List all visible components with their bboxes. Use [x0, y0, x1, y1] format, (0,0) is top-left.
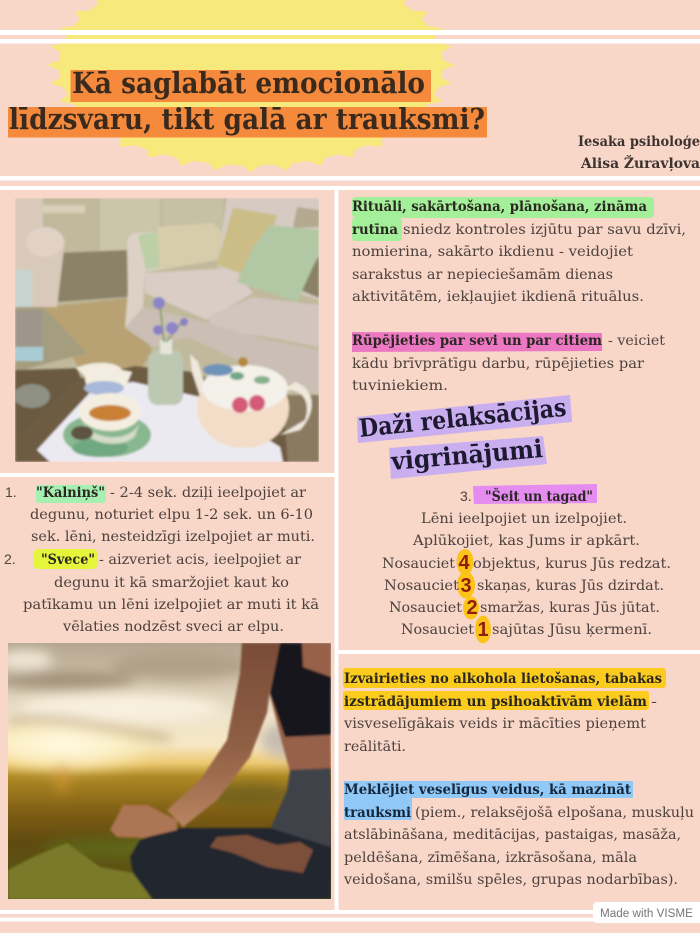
photo: tea tray in living room	[14, 198, 319, 462]
steps 1 and 2: breathing exercises: degunu it kā smaržojiet kaut ko	[54, 575, 289, 591]
step 3: here and now: 4	[458, 552, 470, 574]
step 3: here and now: Nosauciet	[382, 556, 455, 572]
care for self and others paragraph: kādu brīvprātīgu darbu, rūpējieties par	[352, 356, 644, 372]
ritual and routine paragraph: rutīna	[352, 222, 398, 238]
ritual and routine paragraph: nomierina, sakārto ikdienu - veidojiet	[352, 244, 633, 260]
healthy ways to reduce anxiety paragraph	[343, 781, 694, 888]
steps 1 and 2: breathing exercises: - aizveriet acis, ieelpojiet ar	[99, 552, 301, 568]
step 3: here and now: skaņas, kuras Jūs dzirdat.	[477, 578, 664, 594]
author credit: Alisa Žuravļova	[580, 154, 700, 172]
steps 1 and 2: breathing exercises: "Kalniņš"	[36, 485, 105, 501]
steps 1 and 2: breathing exercises: "Svece"	[41, 552, 95, 568]
care for self and others paragraph	[352, 332, 665, 394]
steps 1 and 2: breathing exercises: 2.	[4, 551, 16, 567]
ritual and routine paragraph	[352, 197, 686, 305]
step 3: here and now: 2	[466, 597, 478, 619]
step 3: here and now: objektus, kurus Jūs redzat.	[473, 556, 671, 572]
healthy ways to reduce anxiety paragraph: peldēšana, zīmēšana, izkrāsošana, māla	[344, 849, 637, 866]
step 3: here and now: Nosauciet	[384, 578, 459, 594]
avoid alcohol and tobacco paragraph: Izvairieties no alkohola lietošanas, tabakas	[344, 671, 662, 687]
sunburst behind title	[47, 0, 455, 172]
step 3: here and now: Lēni ieelpojiet un izelpojiet.	[421, 511, 627, 527]
photo: meditation at sunset	[0, 643, 331, 899]
healthy ways to reduce anxiety paragraph: atslābināšana, meditācijas, pastaigas, masāža,	[344, 826, 681, 843]
avoid alcohol and tobacco paragraph	[343, 668, 666, 755]
healthy ways to reduce anxiety paragraph: veidošana, smilšu spēles, grupas nodarbības).	[343, 871, 678, 888]
ritual and routine paragraph: sarakstus ar nepieciešamām dienas	[352, 266, 613, 283]
title	[8, 66, 487, 138]
title: līdzsvaru, tikt galā ar trauksmi?	[9, 102, 485, 136]
avoid alcohol and tobacco paragraph: izstrādājumiem un psihoaktīvām vielām	[344, 694, 647, 710]
steps 1 and 2: breathing exercises: vēlaties nodzēst sveci ar elpu.	[62, 619, 284, 635]
step 3: here and now: 3.	[460, 488, 472, 504]
ritual and routine paragraph: aktivitātēm, iekļaujiet ikdienā rituālus.	[352, 289, 644, 305]
title: Kā saglabāt emocionālo	[72, 66, 425, 100]
avoid alcohol and tobacco paragraph: -	[651, 694, 657, 710]
step 3: here and now: 1	[477, 619, 489, 641]
healthy ways to reduce anxiety paragraph: (piem., relaksējošā elpošana, muskuļu	[415, 804, 694, 821]
care for self and others paragraph: Rūpējieties par sevi un par citiem	[352, 333, 602, 349]
step 3: here and now	[382, 484, 671, 644]
healthy ways to reduce anxiety paragraph: Meklējiet veselīgus veidus, kā mazināt	[344, 782, 631, 798]
heading: relaxation exercises	[357, 393, 572, 479]
step 3: here and now: Nosauciet	[401, 622, 474, 638]
made with visme badge	[593, 902, 700, 923]
step 3: here and now: Nosauciet	[389, 600, 462, 616]
ritual and routine paragraph: Rituāli, sakārtošana, plānošana, zināma	[352, 199, 647, 215]
step 3: here and now: smaržas, kuras Jūs jūtat.	[480, 600, 660, 616]
steps 1 and 2: breathing exercises: - 2-4 sek. dziļi ieelpojiet ar	[110, 485, 306, 501]
step 3: here and now: 3	[460, 575, 472, 597]
avoid alcohol and tobacco paragraph: reālitāti.	[344, 739, 406, 755]
healthy ways to reduce anxiety paragraph: trauksmi	[344, 805, 412, 821]
steps 1 and 2: breathing exercises: degunu, noturiet elpu 1-2 sek. un 6-10	[30, 507, 313, 523]
heading: relaxation exercises: vigrinājumi	[389, 434, 544, 476]
made with visme badge: Made with VISME	[600, 908, 693, 920]
steps 1 and 2: breathing exercises: 1.	[5, 484, 17, 500]
step 3: here and now: Aplūkojiet, kas Jums ir apkārt.	[412, 533, 640, 549]
ritual and routine paragraph: sniedz kontroles izjūtu par savu dzīvi,	[403, 222, 686, 238]
heading: relaxation exercises: Daži relaksācijas	[358, 393, 568, 443]
steps 1 and 2: breathing exercises: sek. lēni, nesteidzīgi izelpojiet ar muti.	[31, 529, 315, 545]
avoid alcohol and tobacco paragraph: visveselīgākais veids ir mācīties pieņemt	[343, 716, 646, 732]
step 3: here and now: sajūtas Jūsu ķermenī.	[492, 622, 652, 638]
steps 1 and 2: breathing exercises: patīkamu un lēni izelpojiet ar muti it kā	[23, 597, 319, 613]
steps 1 and 2: breathing exercises	[4, 484, 319, 635]
author credit	[578, 134, 700, 172]
care for self and others paragraph: tuviniekiem.	[352, 378, 448, 394]
step 3: here and now: "Šeit un tagad"	[485, 487, 593, 505]
care for self and others paragraph: - veiciet	[608, 333, 665, 349]
